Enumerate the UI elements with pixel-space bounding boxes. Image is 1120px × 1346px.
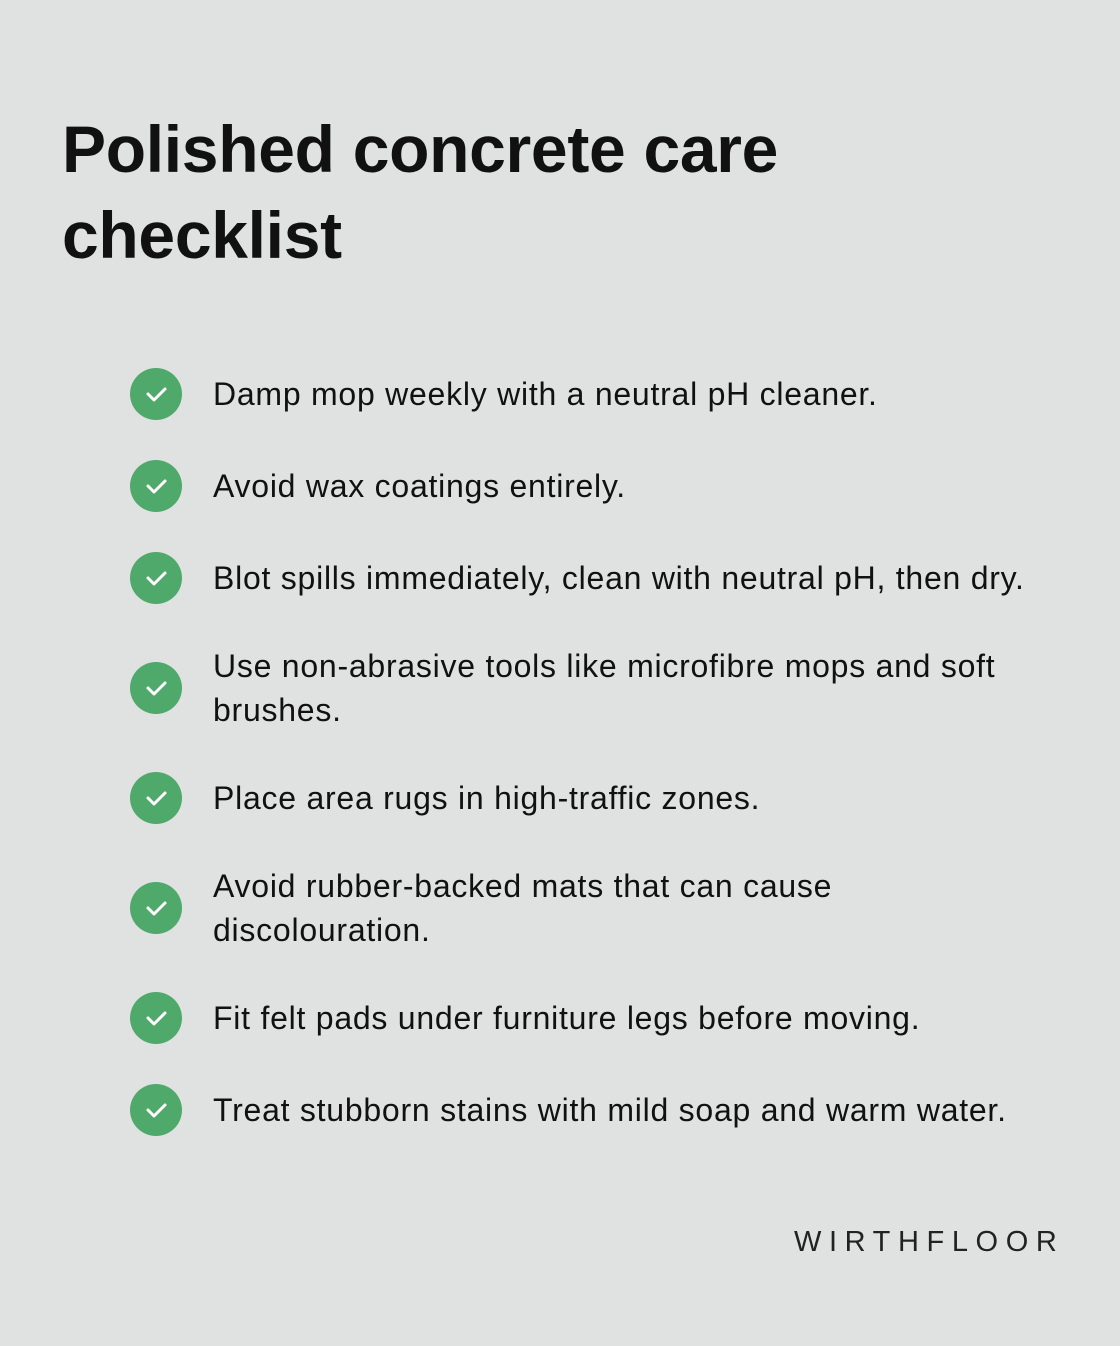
text: Avoid wax coatings entirely. [213, 468, 626, 504]
checklist item 8 [130, 1084, 1007, 1136]
title [62, 112, 778, 272]
icon: check [130, 368, 182, 420]
icon: check [130, 992, 182, 1044]
checklist item 2 [130, 460, 626, 512]
text: Avoid rubber-backed mats that can cause [213, 868, 832, 904]
text: discolouration. [213, 912, 431, 948]
checklist item 4 [130, 648, 995, 728]
text: Blot spills immediately, clean with neutral pH, then dry. [213, 560, 1025, 596]
icon: check [130, 772, 182, 824]
text: Fit felt pads under furniture legs before moving. [213, 1000, 920, 1036]
title: checklist [62, 198, 342, 272]
checklist item 6 [130, 868, 832, 948]
icon: check [130, 552, 182, 604]
icon: check [130, 1084, 182, 1136]
checklist item 5 [130, 772, 760, 824]
text: Use non-abrasive tools like microfibre mops and soft [213, 648, 995, 684]
checklist item 3 [130, 552, 1025, 604]
title: Polished concrete care [62, 112, 778, 186]
checklist item 1 [130, 368, 878, 420]
text [213, 868, 832, 948]
icon: check [130, 662, 182, 714]
text: brushes. [213, 692, 342, 728]
text: Treat stubborn stains with mild soap and warm water. [213, 1092, 1007, 1128]
logo: WIRTHFLOOR [794, 1226, 1064, 1258]
icon: check [130, 882, 182, 934]
checklist item 7 [130, 992, 920, 1044]
icon: check [130, 460, 182, 512]
text: Damp mop weekly with a neutral pH cleaner. [213, 376, 878, 412]
text: Place area rugs in high-traffic zones. [213, 780, 760, 816]
text [213, 648, 995, 728]
